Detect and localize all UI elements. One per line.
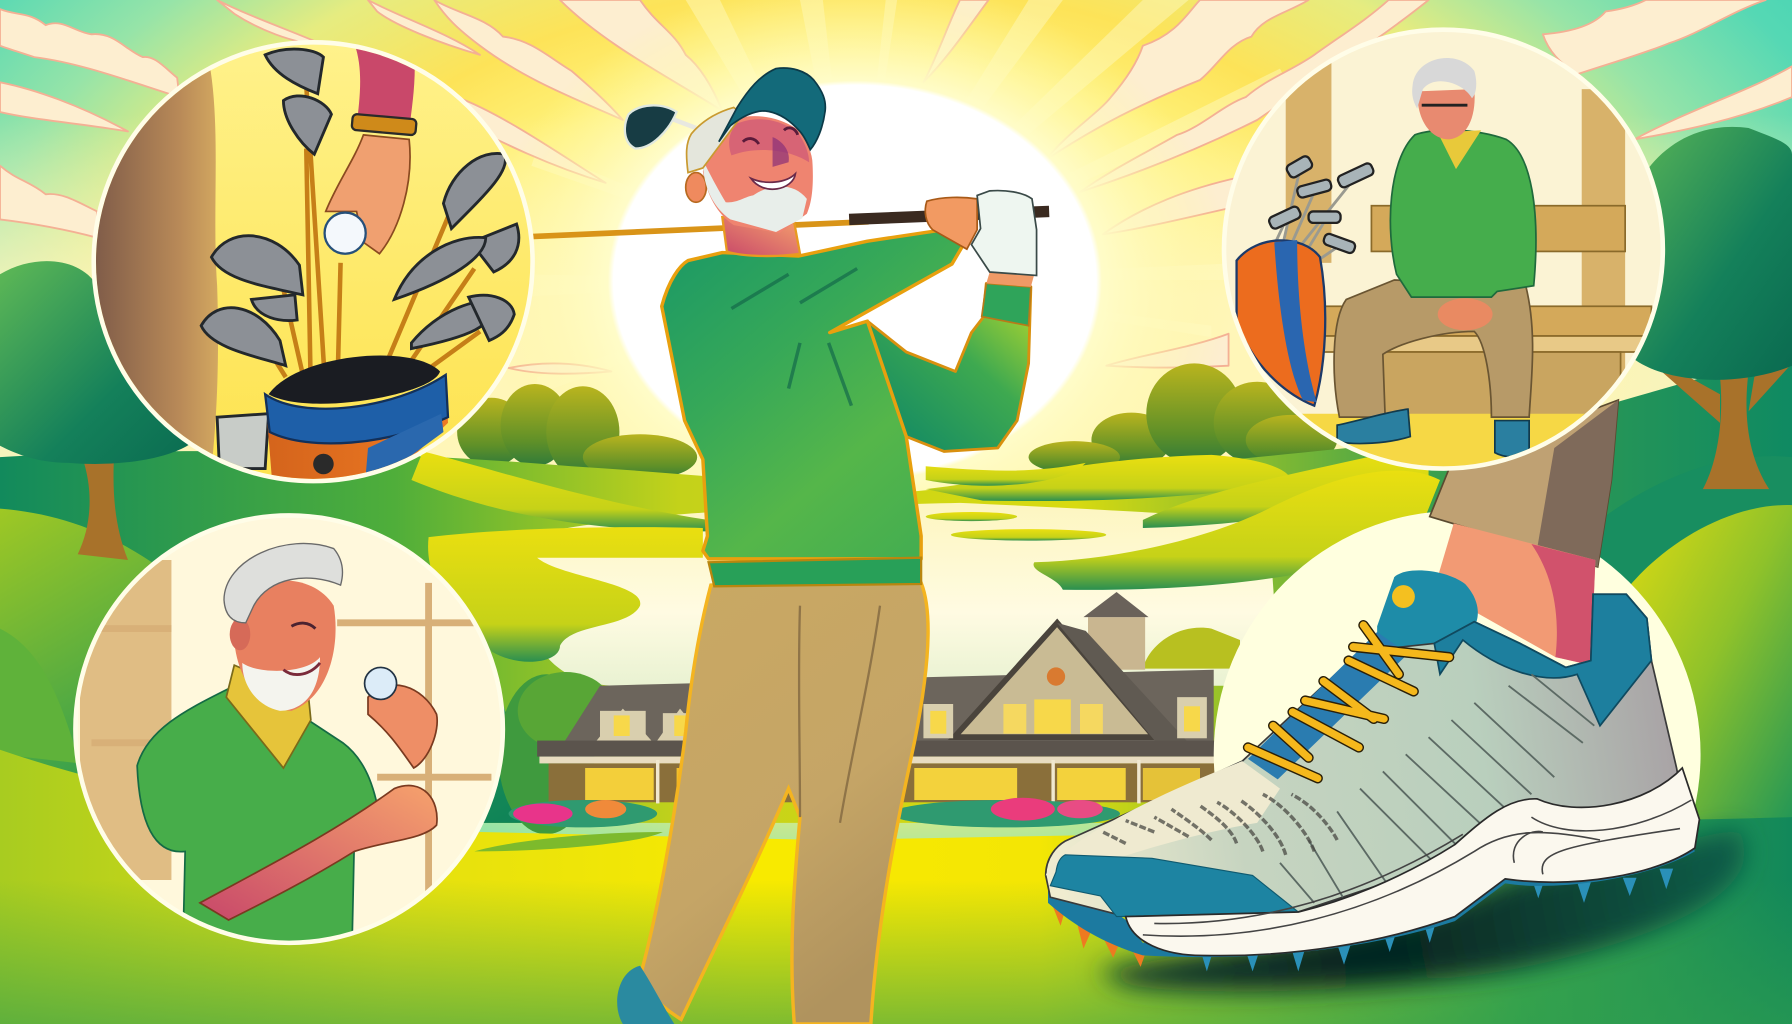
bag and clubs [1237, 155, 1375, 406]
seated man shoes [1337, 409, 1529, 457]
lace gap [1248, 632, 1408, 779]
seated man collar [1438, 130, 1481, 169]
fairways [411, 451, 1440, 662]
arm with watch [326, 43, 417, 254]
circle: clubs in bag [91, 34, 549, 491]
lake [514, 503, 1280, 686]
sun [478, 0, 1232, 587]
toe vamp [1046, 761, 1280, 875]
sweater [662, 230, 963, 559]
trouser cuff above shoe [1430, 400, 1618, 567]
neck [722, 217, 800, 256]
toe cap blue [1050, 855, 1298, 917]
far cuff [982, 283, 1031, 326]
spikes [1200, 869, 1673, 971]
seated man head [1412, 58, 1476, 139]
midground course [0, 354, 1792, 823]
club shaft and head [531, 105, 1049, 237]
left hills [0, 509, 537, 823]
shoe spotlight circle [1214, 512, 1701, 804]
right arm with hand [368, 685, 437, 768]
sweater folds [731, 269, 857, 406]
upper [1046, 594, 1682, 917]
sun rays [514, 0, 1291, 394]
toe perforations [1103, 794, 1337, 855]
person's leg [96, 70, 218, 454]
club heads [201, 49, 519, 469]
far arm [867, 283, 1031, 451]
rear shoe [617, 966, 674, 1024]
side stripes [1280, 674, 1594, 903]
wood wall [80, 560, 171, 880]
ankle [1438, 523, 1595, 665]
wood posts [1286, 34, 1625, 421]
tongue eyelet [1392, 585, 1415, 608]
golf ball [325, 213, 366, 254]
clouds [0, 0, 1792, 374]
outsole [1048, 840, 1695, 957]
cap [687, 68, 825, 173]
trousers [640, 583, 928, 1024]
sweater hem [709, 558, 921, 586]
seated man hands [1438, 298, 1493, 330]
ball [365, 667, 397, 699]
seated man sweater [1390, 130, 1536, 297]
tongue [1377, 570, 1478, 709]
circle: golfer inspecting ball [69, 514, 514, 949]
circle: golfer seated on bench [1223, 29, 1669, 480]
laces [1248, 625, 1449, 778]
club shafts [274, 90, 482, 378]
head [224, 543, 342, 711]
near hand [925, 197, 977, 249]
tree: right [1618, 127, 1792, 489]
distant tree line [457, 363, 1337, 480]
seated man trousers [1334, 280, 1533, 417]
flower beds [509, 798, 1120, 827]
clubhouse [498, 592, 1240, 834]
floor [1302, 414, 1585, 466]
collar [226, 665, 311, 768]
tree: left [0, 261, 203, 560]
bag [265, 356, 448, 480]
bench [1314, 206, 1651, 415]
midsole [1126, 768, 1699, 956]
window frame [91, 583, 491, 891]
foreground lawn [0, 750, 1792, 1024]
left arm with hand [200, 786, 437, 920]
right hills [1600, 456, 1792, 869]
golfer [531, 68, 1049, 1024]
golf shoe [1046, 570, 1699, 971]
shoe shadow [1097, 829, 1745, 992]
head [686, 116, 813, 233]
far wrist [986, 272, 1034, 287]
glove [971, 191, 1037, 275]
midsole lines [1143, 800, 1691, 936]
body [137, 686, 383, 949]
collar [1434, 594, 1651, 726]
